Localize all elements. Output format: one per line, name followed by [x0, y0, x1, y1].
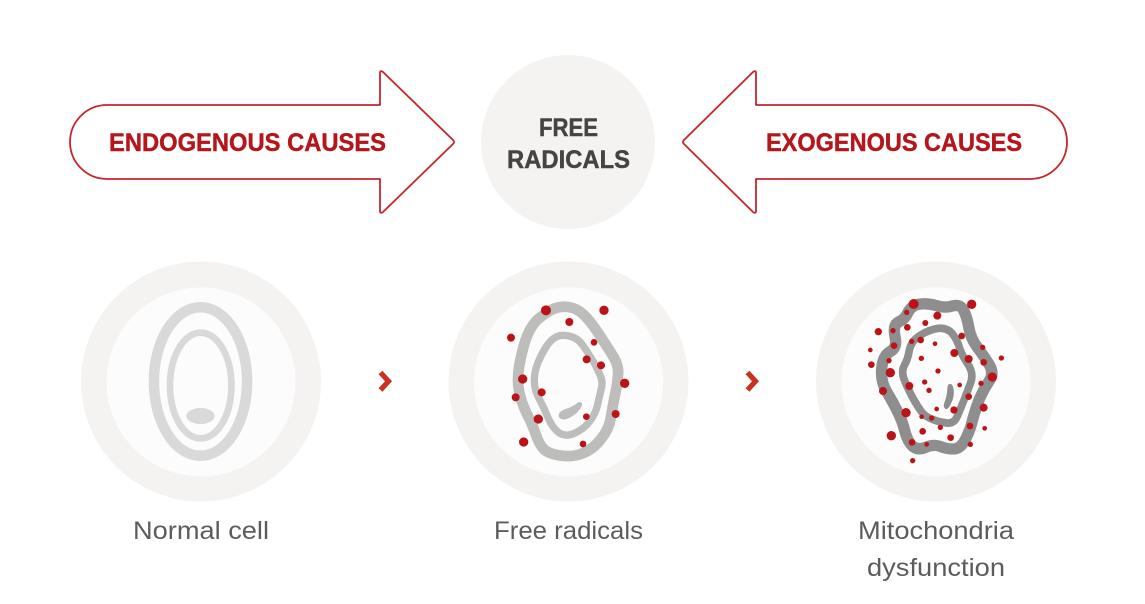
panel: normal cell	[81, 262, 321, 502]
panel: free radicals cell	[448, 262, 688, 502]
label: normal cell: Normal cell	[133, 517, 269, 545]
label: free radicals: Free radicals	[494, 517, 643, 545]
panel: mitochondria dysfunction cell	[816, 262, 1056, 502]
label: mitochondria dysfunction: dysfunction	[867, 554, 1005, 582]
circle: free radicals: FREE	[539, 114, 598, 142]
label: mitochondria dysfunction	[858, 517, 1014, 582]
arrow: chevron one	[380, 372, 388, 390]
arrow: chevron two	[748, 372, 756, 390]
label: mitochondria dysfunction: Mitochondria	[858, 517, 1014, 545]
arrow: exogenous causes: EXOGENOUS CAUSES	[766, 129, 1022, 157]
arrow: exogenous causes	[683, 71, 1067, 213]
circle: free radicals: RADICALS	[507, 146, 630, 174]
circle: free radicals	[481, 55, 655, 229]
arrow: endogenous causes: ENDOGENOUS CAUSES	[109, 129, 386, 157]
arrow: endogenous causes	[70, 71, 454, 213]
